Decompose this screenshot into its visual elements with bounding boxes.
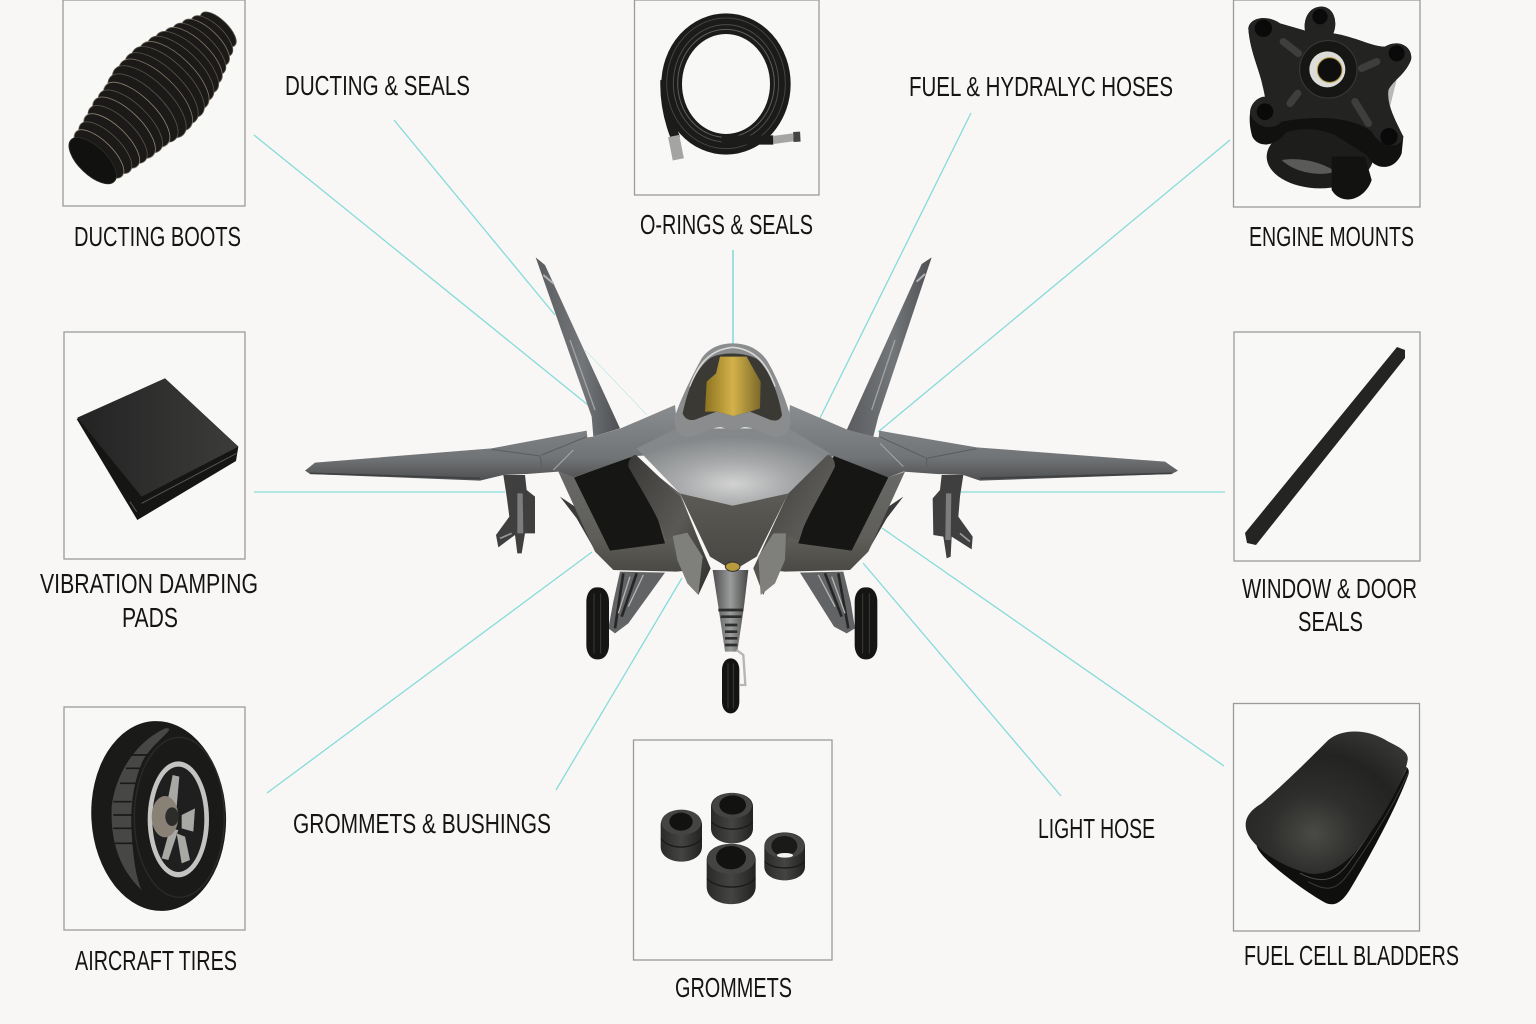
tail fins bbox=[536, 257, 932, 437]
frame bbox=[1234, 332, 1420, 561]
frame bbox=[64, 707, 245, 930]
air intakes bbox=[558, 456, 905, 572]
fighter jet bbox=[305, 257, 1178, 713]
icon: seal strip bbox=[1245, 347, 1405, 545]
frame bbox=[63, 0, 245, 206]
icon: fuel cell bladder bbox=[1246, 731, 1409, 904]
label: O-RINGS & SEALS bbox=[640, 209, 813, 240]
wings bbox=[305, 405, 1178, 481]
icon: ducting boot bbox=[61, 6, 242, 192]
label bbox=[40, 568, 258, 633]
icon: rubber pad bbox=[77, 378, 238, 520]
label: VIBRATION DAMPING bbox=[40, 568, 258, 599]
frame bbox=[1234, 0, 1420, 207]
cockpit canopy bbox=[675, 343, 790, 437]
label: SEALS bbox=[1298, 606, 1363, 637]
label: WINDOW & DOOR bbox=[1242, 573, 1417, 604]
label: fuel and hydraulic hoses: FUEL & HYDRALYC HOSES bbox=[909, 71, 1173, 102]
icon: rubber grommets bbox=[661, 793, 805, 904]
forward fuselage bbox=[628, 428, 835, 595]
label: AIRCRAFT TIRES bbox=[75, 945, 237, 976]
label: PADS bbox=[122, 602, 178, 633]
panel: vibration damping pads bbox=[40, 332, 258, 633]
nose landing gear bbox=[713, 570, 748, 713]
icon: engine mount bbox=[1248, 7, 1411, 199]
label: light hose: LIGHT HOSE bbox=[1038, 813, 1155, 844]
label bbox=[1242, 573, 1417, 637]
main landing gear bbox=[586, 572, 877, 659]
label: grommets and bushings: GROMMETS & BUSHINGS bbox=[293, 808, 551, 839]
label: GROMMETS bbox=[675, 972, 792, 1003]
frame bbox=[64, 332, 245, 559]
panel: grommets bbox=[634, 740, 832, 1003]
frame bbox=[1234, 704, 1420, 931]
frame bbox=[634, 0, 819, 195]
frame bbox=[634, 740, 832, 960]
panel: window and door seals bbox=[1234, 332, 1420, 637]
label: DUCTING BOOTS bbox=[74, 221, 241, 252]
panel: fuel cell bladders bbox=[1234, 704, 1459, 971]
weapon pylons bbox=[496, 475, 973, 558]
panel: engine mounts bbox=[1234, 0, 1420, 252]
leader lines bbox=[254, 113, 1230, 796]
panel: o-rings and seals bbox=[634, 0, 819, 240]
label: ducting and seals: DUCTING & SEALS bbox=[285, 70, 470, 101]
label: ENGINE MOUNTS bbox=[1249, 221, 1414, 252]
label: FUEL CELL BLADDERS bbox=[1244, 940, 1459, 971]
panel: aircraft tires bbox=[64, 707, 245, 976]
icon: tire bbox=[86, 718, 231, 914]
icon: coiled hose bbox=[665, 18, 800, 159]
panel: ducting boots bbox=[61, 0, 245, 252]
